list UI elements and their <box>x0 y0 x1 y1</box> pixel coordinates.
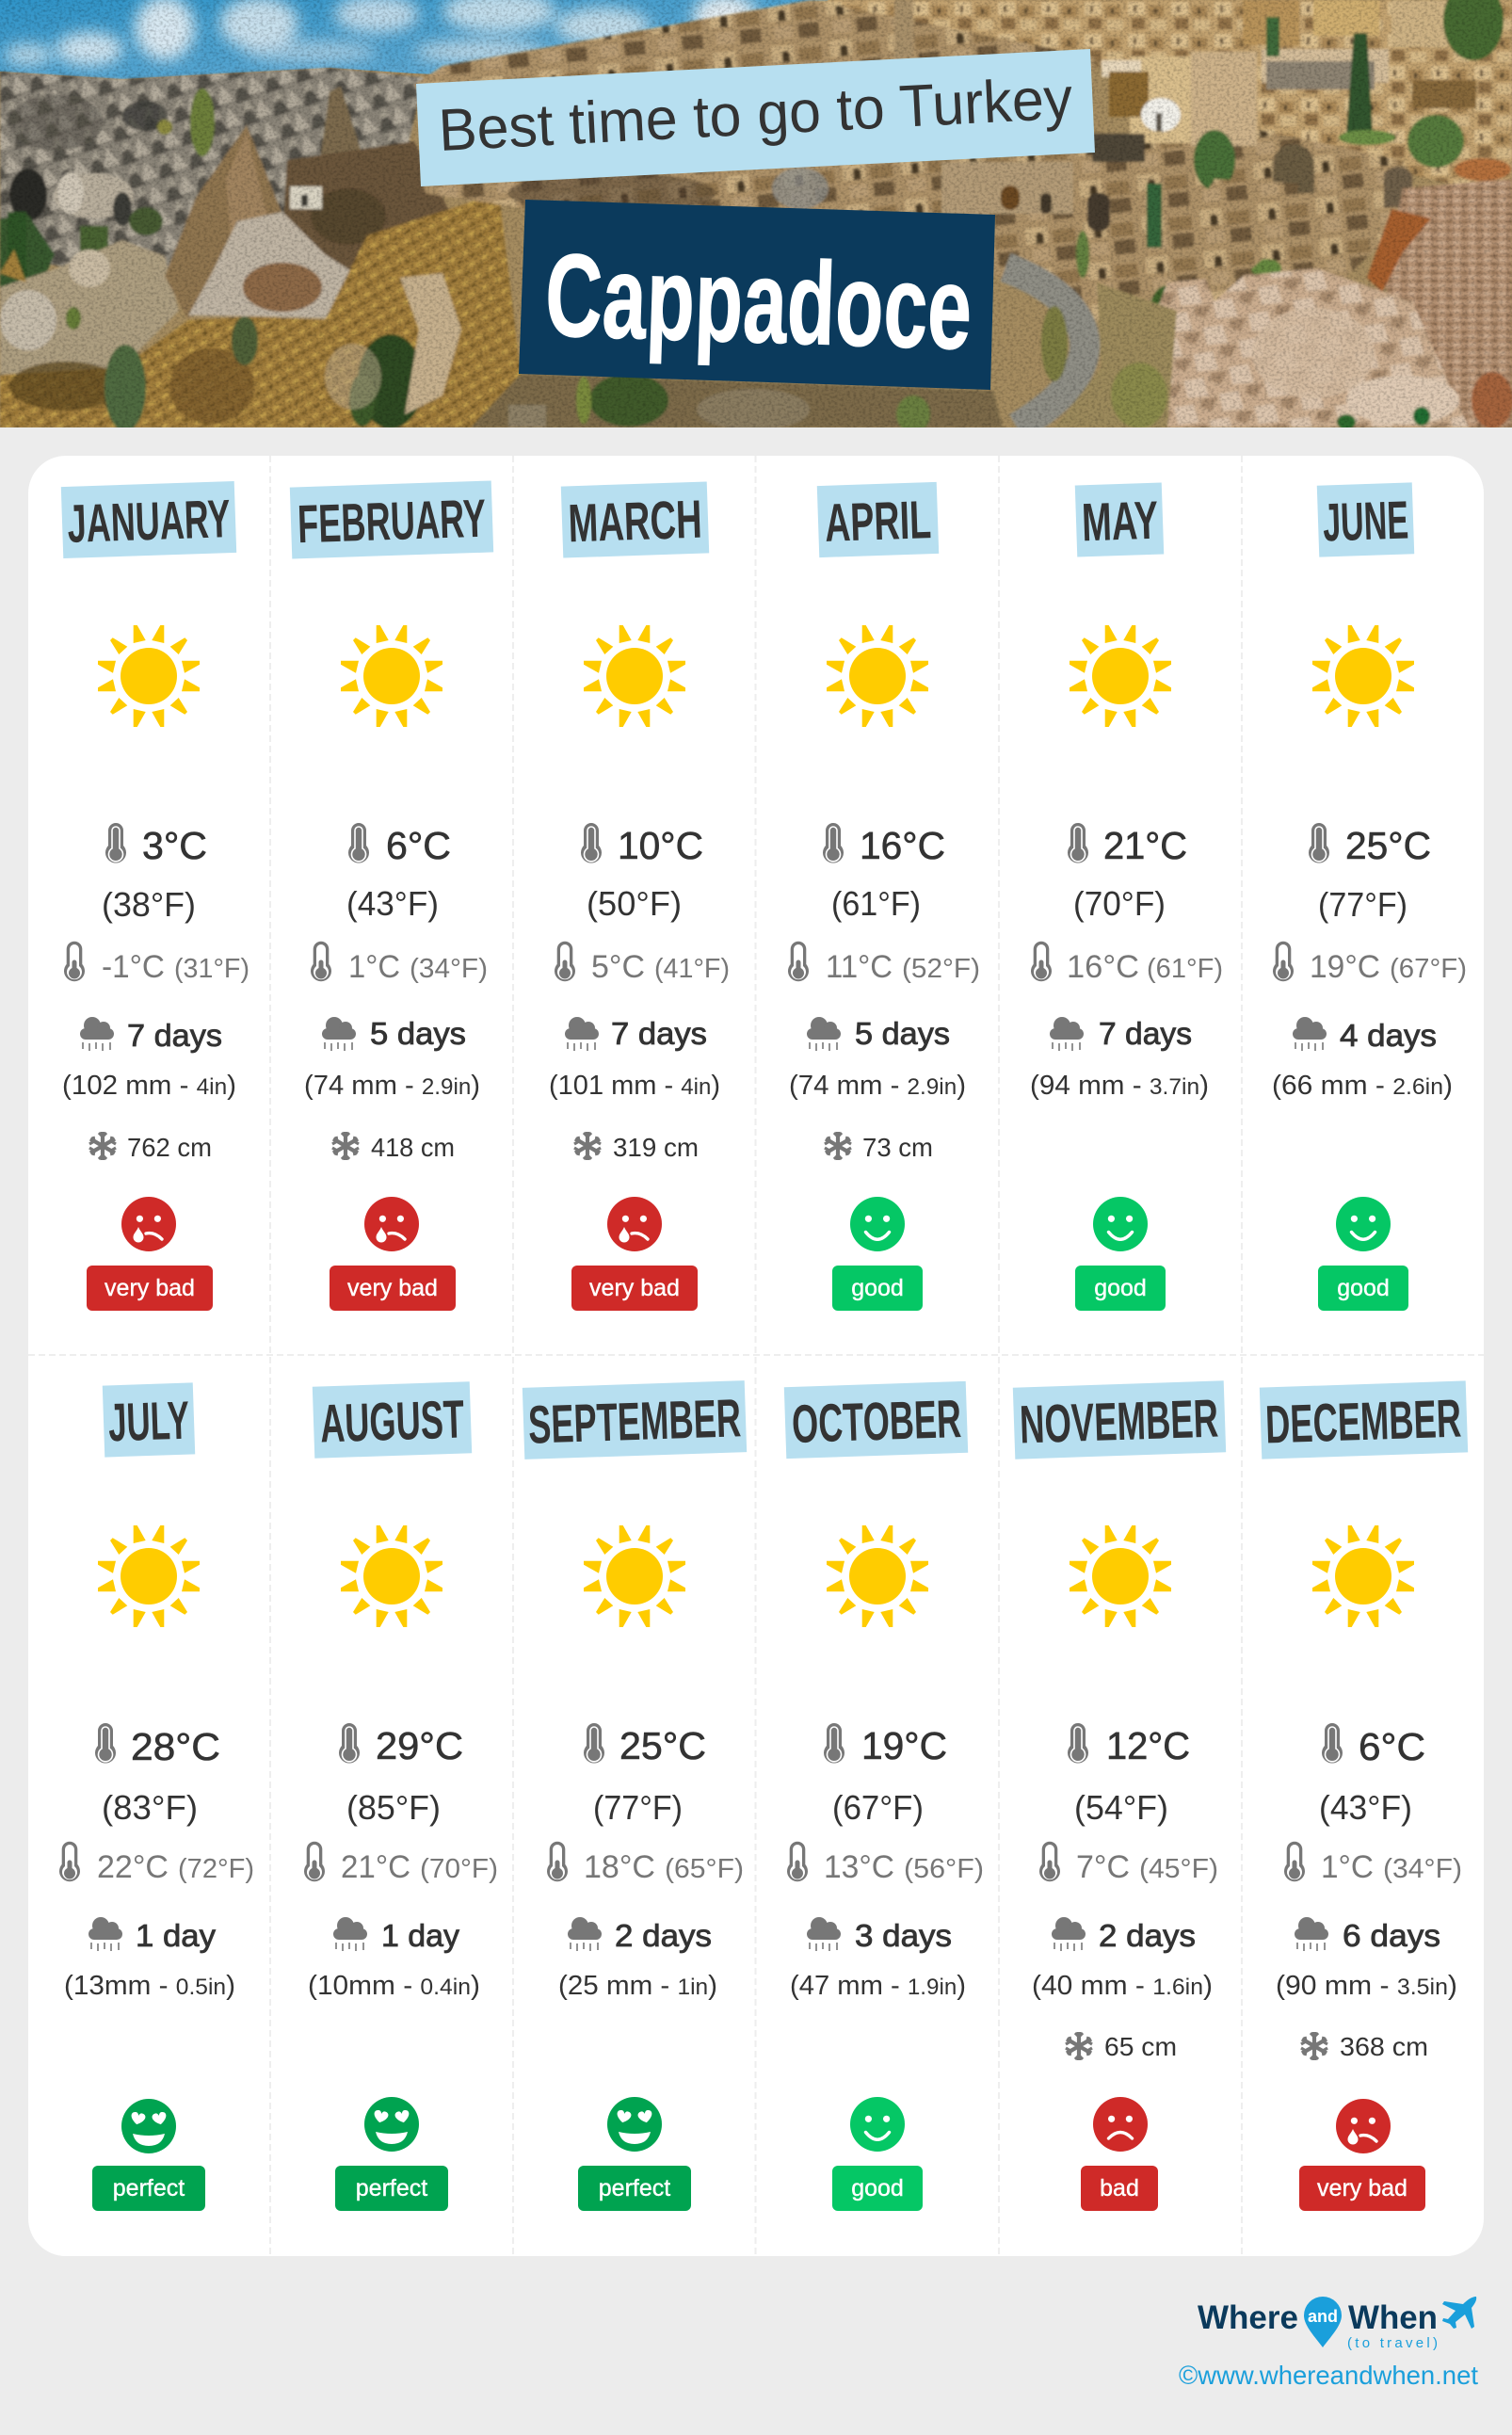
precipitation: (90 mm - 3.5in) <box>1276 1971 1457 2001</box>
rating badge: very bad <box>105 1275 195 1301</box>
rainy days <box>1293 1017 1437 1053</box>
month: June <box>1272 482 1467 1311</box>
month label <box>103 1382 195 1458</box>
high fahrenheit: (83°F) <box>102 1788 198 1827</box>
month: January <box>61 481 249 1311</box>
rainy days <box>807 1016 950 1051</box>
low temperature: (41°F) <box>654 954 730 984</box>
month label <box>561 481 709 558</box>
low temperature: 19°C <box>1310 949 1380 985</box>
icon: sun <box>1312 1525 1414 1627</box>
low temperature: (65°F) <box>665 1854 744 1884</box>
precipitation: (13mm - 0.5in) <box>64 1971 235 2001</box>
low temperature: (61°F) <box>1147 954 1223 984</box>
month label <box>784 1381 968 1459</box>
low temperature: 1°C <box>1321 1849 1374 1885</box>
month label: JULY <box>107 1391 190 1453</box>
rating badge: perfect <box>113 2175 185 2201</box>
title banner: Cappadoce <box>519 200 995 390</box>
rainy days <box>333 1917 460 1953</box>
high fahrenheit: (77°F) <box>1318 885 1407 924</box>
month: September <box>523 1380 747 2211</box>
high temperature: 29°C <box>376 1724 463 1767</box>
rating badge <box>335 2166 448 2211</box>
icon: sun <box>98 1525 200 1627</box>
rating badge <box>1075 1266 1166 1311</box>
high temperature <box>823 823 945 867</box>
month label <box>1317 482 1414 557</box>
month label: MARCH <box>568 490 703 554</box>
title banner: Cappadoce: Cappadoce <box>543 230 973 375</box>
rainy days: 4 days <box>1340 1018 1437 1053</box>
rainy days <box>1050 1016 1192 1051</box>
icon: rating face <box>1093 1197 1148 1251</box>
rating badge: very bad <box>589 1275 680 1301</box>
rainy days <box>568 1917 712 1953</box>
rating badge: good <box>851 2175 904 2201</box>
month: August <box>304 1381 498 2211</box>
low temperature: (31°F) <box>174 954 249 984</box>
low temperature: 7°C <box>1076 1849 1130 1885</box>
month label <box>61 481 236 558</box>
month label <box>523 1380 747 1459</box>
high temperature: 19°C <box>861 1724 947 1767</box>
high temperature: 21°C <box>1103 824 1187 867</box>
month label <box>313 1381 472 1459</box>
icon: sun <box>1070 625 1171 727</box>
rainy days <box>88 1917 217 1953</box>
month: March <box>549 481 730 1311</box>
rainy days: 5 days <box>855 1016 950 1051</box>
snow <box>89 1132 212 1162</box>
icon: rating face <box>850 2097 905 2152</box>
rainy days: 1 day <box>381 1918 460 1953</box>
high temperature: 10°C <box>618 824 703 867</box>
month label <box>290 480 493 559</box>
rating badge <box>571 1266 698 1311</box>
high temperature <box>95 1723 220 1768</box>
month: April <box>788 482 980 1311</box>
rating badge <box>1299 2166 1425 2211</box>
low temperature <box>59 1842 254 1885</box>
low temperature: (34°F) <box>410 954 488 984</box>
icon: rating face <box>1336 1197 1391 1251</box>
rating badge <box>578 2166 691 2211</box>
precipitation: (66 mm - 2.6in) <box>1272 1071 1453 1101</box>
rainy days: 1 day <box>136 1918 217 1953</box>
low temperature: 1°C <box>348 949 400 985</box>
icon: map pin <box>1304 2297 1342 2347</box>
low temperature <box>64 942 249 985</box>
low temperature <box>1284 1842 1462 1885</box>
rainy days <box>1295 1917 1440 1953</box>
low temperature: (70°F) <box>420 1854 498 1884</box>
high fahrenheit: (61°F) <box>831 884 921 923</box>
rating badge: bad <box>1100 2175 1139 2201</box>
high fahrenheit: (77°F) <box>593 1788 683 1827</box>
rating badge <box>1081 2166 1158 2211</box>
snow: 73 cm <box>862 1133 933 1162</box>
icon: rating face <box>364 2097 419 2152</box>
rainy days: 3 days <box>855 1918 952 1953</box>
icon: rating face <box>1336 2099 1391 2153</box>
low temperature: (56°F) <box>904 1854 984 1884</box>
low temperature <box>1039 1842 1218 1885</box>
precipitation: (102 mm - 4in) <box>62 1071 236 1101</box>
icon: sun <box>827 625 928 727</box>
icon: rating face <box>607 1197 662 1251</box>
rating badge: good <box>851 1275 904 1301</box>
high fahrenheit: (54°F) <box>1074 1788 1168 1827</box>
low temperature <box>1031 942 1223 985</box>
precipitation: (47 mm - 1.9in) <box>790 1971 966 2001</box>
low temperature: (34°F) <box>1383 1854 1462 1884</box>
icon: airplane <box>1442 2297 1476 2329</box>
month label: JANUARY <box>67 489 232 555</box>
high fahrenheit: (70°F) <box>1073 884 1166 923</box>
rainy days: 7 days <box>1099 1016 1192 1051</box>
precipitation: (10mm - 0.4in) <box>308 1971 480 2001</box>
month: July <box>59 1382 254 2211</box>
icon: sun <box>1070 1525 1171 1627</box>
month: February <box>290 480 493 1311</box>
rating badge <box>330 1266 456 1311</box>
precipitation: (101 mm - 4in) <box>549 1071 720 1101</box>
high temperature: 12°C <box>1106 1724 1190 1767</box>
high temperature: 6°C <box>386 824 451 867</box>
rainy days <box>322 1016 466 1051</box>
rainy days: 6 days <box>1343 1918 1440 1953</box>
low temperature: 16°C <box>1067 949 1139 985</box>
rating badge <box>92 2166 205 2211</box>
high fahrenheit: (67°F) <box>832 1788 924 1827</box>
low temperature <box>555 942 730 985</box>
low temperature: -1°C <box>102 949 165 985</box>
high fahrenheit: (43°F) <box>1319 1788 1412 1827</box>
logo: Where and When to travel <box>1198 2297 1476 2351</box>
high temperature: 25°C <box>1345 824 1431 867</box>
icon: rating face <box>1093 2097 1148 2152</box>
title banner: Best time to go to Turkey: Best time to go to Turkey <box>437 65 1074 164</box>
rating badge: perfect <box>356 2175 427 2201</box>
rainy days <box>565 1016 707 1051</box>
snow: 762 cm <box>127 1133 212 1162</box>
low temperature <box>1273 942 1467 985</box>
low temperature: 21°C <box>341 1849 410 1885</box>
high fahrenheit: (38°F) <box>102 885 196 924</box>
month label: SEPTEMBER <box>527 1388 742 1456</box>
icon: rating face <box>607 2097 662 2152</box>
high temperature: 28°C <box>131 1725 220 1768</box>
low temperature: 5°C <box>591 949 645 985</box>
snow <box>332 1132 455 1162</box>
high temperature <box>1309 823 1431 867</box>
high temperature <box>581 823 703 867</box>
month label <box>817 482 939 557</box>
rating badge <box>832 1266 923 1311</box>
low temperature: (45°F) <box>1139 1854 1218 1884</box>
icon: sun <box>341 625 442 727</box>
high temperature <box>824 1723 947 1767</box>
month: October <box>784 1381 984 2211</box>
high temperature <box>1068 823 1187 867</box>
high temperature <box>339 1723 463 1767</box>
low temperature <box>304 1842 498 1885</box>
rating badge: very bad <box>1317 2175 1407 2201</box>
month label <box>1075 482 1164 557</box>
icon: sun <box>341 1525 442 1627</box>
snow: 418 cm <box>371 1133 455 1162</box>
rating badge <box>832 2166 923 2211</box>
snow: 65 cm <box>1104 2032 1177 2061</box>
low temperature: (67°F) <box>1390 954 1467 984</box>
high temperature: 6°C <box>1359 1725 1425 1768</box>
low temperature <box>787 1842 984 1885</box>
low temperature: 22°C <box>97 1849 169 1885</box>
high temperature <box>584 1723 706 1767</box>
icon: map pin: and <box>1308 2307 1338 2326</box>
snow <box>825 1132 933 1162</box>
precipitation: (40 mm - 1.6in) <box>1032 1971 1213 2001</box>
low temperature <box>788 942 980 985</box>
month label: FEBRUARY <box>297 489 487 555</box>
high temperature: 16°C <box>860 824 945 867</box>
high temperature: 3°C <box>142 824 207 867</box>
hero photo: Cappadocia landscape <box>0 0 1512 433</box>
rating badge: very bad <box>347 1275 438 1301</box>
icon: sun <box>98 625 200 727</box>
high fahrenheit: (50°F) <box>587 884 682 923</box>
snow <box>1301 2032 1428 2061</box>
precipitation: (94 mm - 3.7in) <box>1030 1071 1209 1101</box>
high fahrenheit: (43°F) <box>346 884 439 923</box>
low temperature <box>311 942 488 985</box>
rainy days: 5 days <box>370 1016 466 1051</box>
low temperature <box>547 1842 744 1885</box>
icon: rating face <box>121 1197 176 1251</box>
precipitation: (25 mm - 1in) <box>558 1971 717 2001</box>
rating badge: perfect <box>599 2175 670 2201</box>
icon: sun <box>1312 625 1414 727</box>
low temperature: (72°F) <box>178 1854 254 1884</box>
website credit: ©www.whereandwhen.net <box>1179 2361 1478 2390</box>
icon: rating face <box>364 1197 419 1251</box>
month label: AUGUST <box>319 1389 465 1455</box>
icon: sun <box>827 1525 928 1627</box>
month label: APRIL <box>824 490 932 554</box>
month label: OCTOBER <box>791 1389 962 1455</box>
icon: sun <box>584 1525 685 1627</box>
rainy days: 7 days <box>127 1018 222 1053</box>
high temperature <box>348 823 451 867</box>
logo: Where and When to travel: (to travel) <box>1347 2335 1438 2351</box>
snow <box>1066 2032 1177 2061</box>
rainy days: 2 days <box>1099 1918 1196 1953</box>
rainy days: 7 days <box>611 1016 707 1051</box>
rainy days <box>1052 1917 1196 1953</box>
month label: JUNE <box>1322 491 1409 553</box>
icon: rating face <box>121 2099 176 2153</box>
low temperature: 11°C <box>826 949 893 985</box>
high temperature <box>105 823 207 867</box>
high temperature: 25°C <box>619 1724 706 1767</box>
month: May <box>1030 482 1223 1311</box>
low temperature: (52°F) <box>902 954 980 984</box>
icon: sun <box>584 625 685 727</box>
snow: 319 cm <box>613 1133 699 1162</box>
rainy days: 2 days <box>615 1918 712 1953</box>
rating badge: good <box>1094 1275 1147 1301</box>
month: November <box>1013 1380 1226 2211</box>
precipitation: (74 mm - 2.9in) <box>304 1071 480 1101</box>
high fahrenheit: (85°F) <box>346 1788 441 1827</box>
month label: MAY <box>1081 491 1159 553</box>
snow <box>574 1132 699 1162</box>
rating badge <box>87 1266 213 1311</box>
rating badge <box>1318 1266 1408 1311</box>
rainy days <box>807 1917 952 1953</box>
low temperature: 13°C <box>824 1849 894 1885</box>
month label <box>1013 1380 1226 1459</box>
sky <box>0 0 828 80</box>
panel: monthly weather calendar <box>28 456 1484 2256</box>
icon: rating face <box>850 1197 905 1251</box>
snow: 368 cm <box>1340 2032 1428 2061</box>
high temperature <box>1068 1723 1190 1767</box>
logo: Where and When to travel: Where <box>1198 2299 1298 2336</box>
low temperature: 18°C <box>584 1849 655 1885</box>
rainy days <box>80 1017 222 1053</box>
month label: NOVEMBER <box>1019 1389 1219 1455</box>
month: December <box>1260 1380 1468 2211</box>
high temperature <box>1322 1723 1425 1768</box>
logo: Where and When to travel: When <box>1348 2299 1438 2336</box>
rating badge: good <box>1337 1275 1390 1301</box>
precipitation: (74 mm - 2.9in) <box>789 1071 966 1101</box>
